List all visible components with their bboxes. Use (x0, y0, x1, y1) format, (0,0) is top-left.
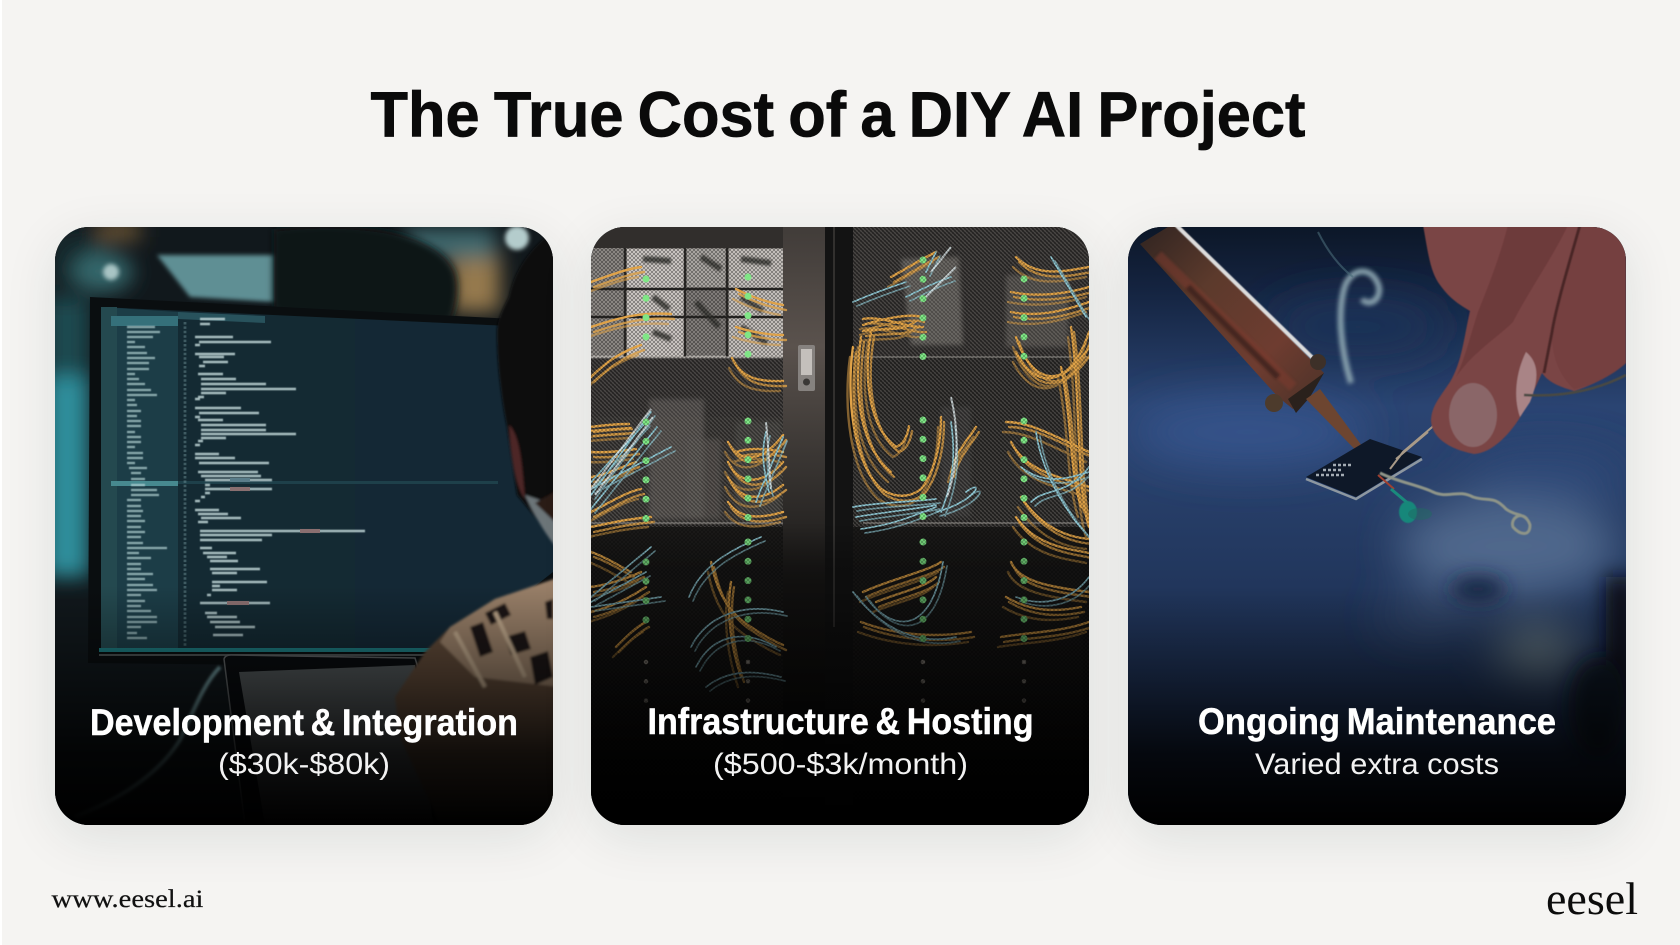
status LEDs (646, 260, 1024, 639)
panel: development and integration (55, 227, 553, 825)
door (783, 227, 825, 825)
heading: Ongoing Maintenance (1198, 701, 1556, 742)
soldering iron (1140, 222, 1378, 473)
code lines (195, 319, 365, 635)
photo: developer at monitor (45, 223, 560, 825)
cost range: ($30k-$80k) (218, 748, 390, 781)
photo: soldering a chip (1128, 222, 1636, 825)
laptop (224, 655, 455, 825)
shirt (395, 577, 560, 825)
cost note: Varied extra costs (1255, 748, 1499, 781)
wire and solder (1378, 422, 1530, 534)
fade overlay (1128, 227, 1626, 825)
heading: Infrastructure & Hosting (648, 701, 1034, 742)
code tree in sidebar (127, 327, 167, 638)
person head (497, 227, 560, 552)
panel: ongoing maintenance (1128, 227, 1626, 825)
light panel (591, 248, 783, 358)
page edge highlight (0, 0, 2, 945)
circuit chip (1306, 439, 1422, 499)
orange cables (588, 252, 1092, 687)
cost range: ($500-$3k/month) (713, 748, 968, 781)
brand logo: eesel (1546, 874, 1638, 924)
door handle (798, 345, 815, 391)
title: The True Cost of a DIY AI Project (370, 79, 1306, 151)
fade overlay (55, 227, 553, 825)
line numbers (184, 322, 186, 647)
fade overlay (591, 227, 1089, 825)
fingers (1423, 225, 1626, 454)
white cable highlights (591, 247, 957, 497)
lower rack dimming (591, 522, 1089, 825)
heading: Development & Integration (90, 702, 518, 743)
mottled rack fronts (649, 257, 1068, 519)
cable (75, 667, 220, 817)
blue cables (591, 252, 1093, 691)
website url: www.eesel.ai (52, 886, 204, 913)
photo: server racks (588, 227, 1093, 825)
monitor (88, 297, 553, 667)
smoke (1341, 271, 1379, 383)
panel: infrastructure and hosting (591, 227, 1089, 825)
perforated mesh (591, 357, 783, 825)
